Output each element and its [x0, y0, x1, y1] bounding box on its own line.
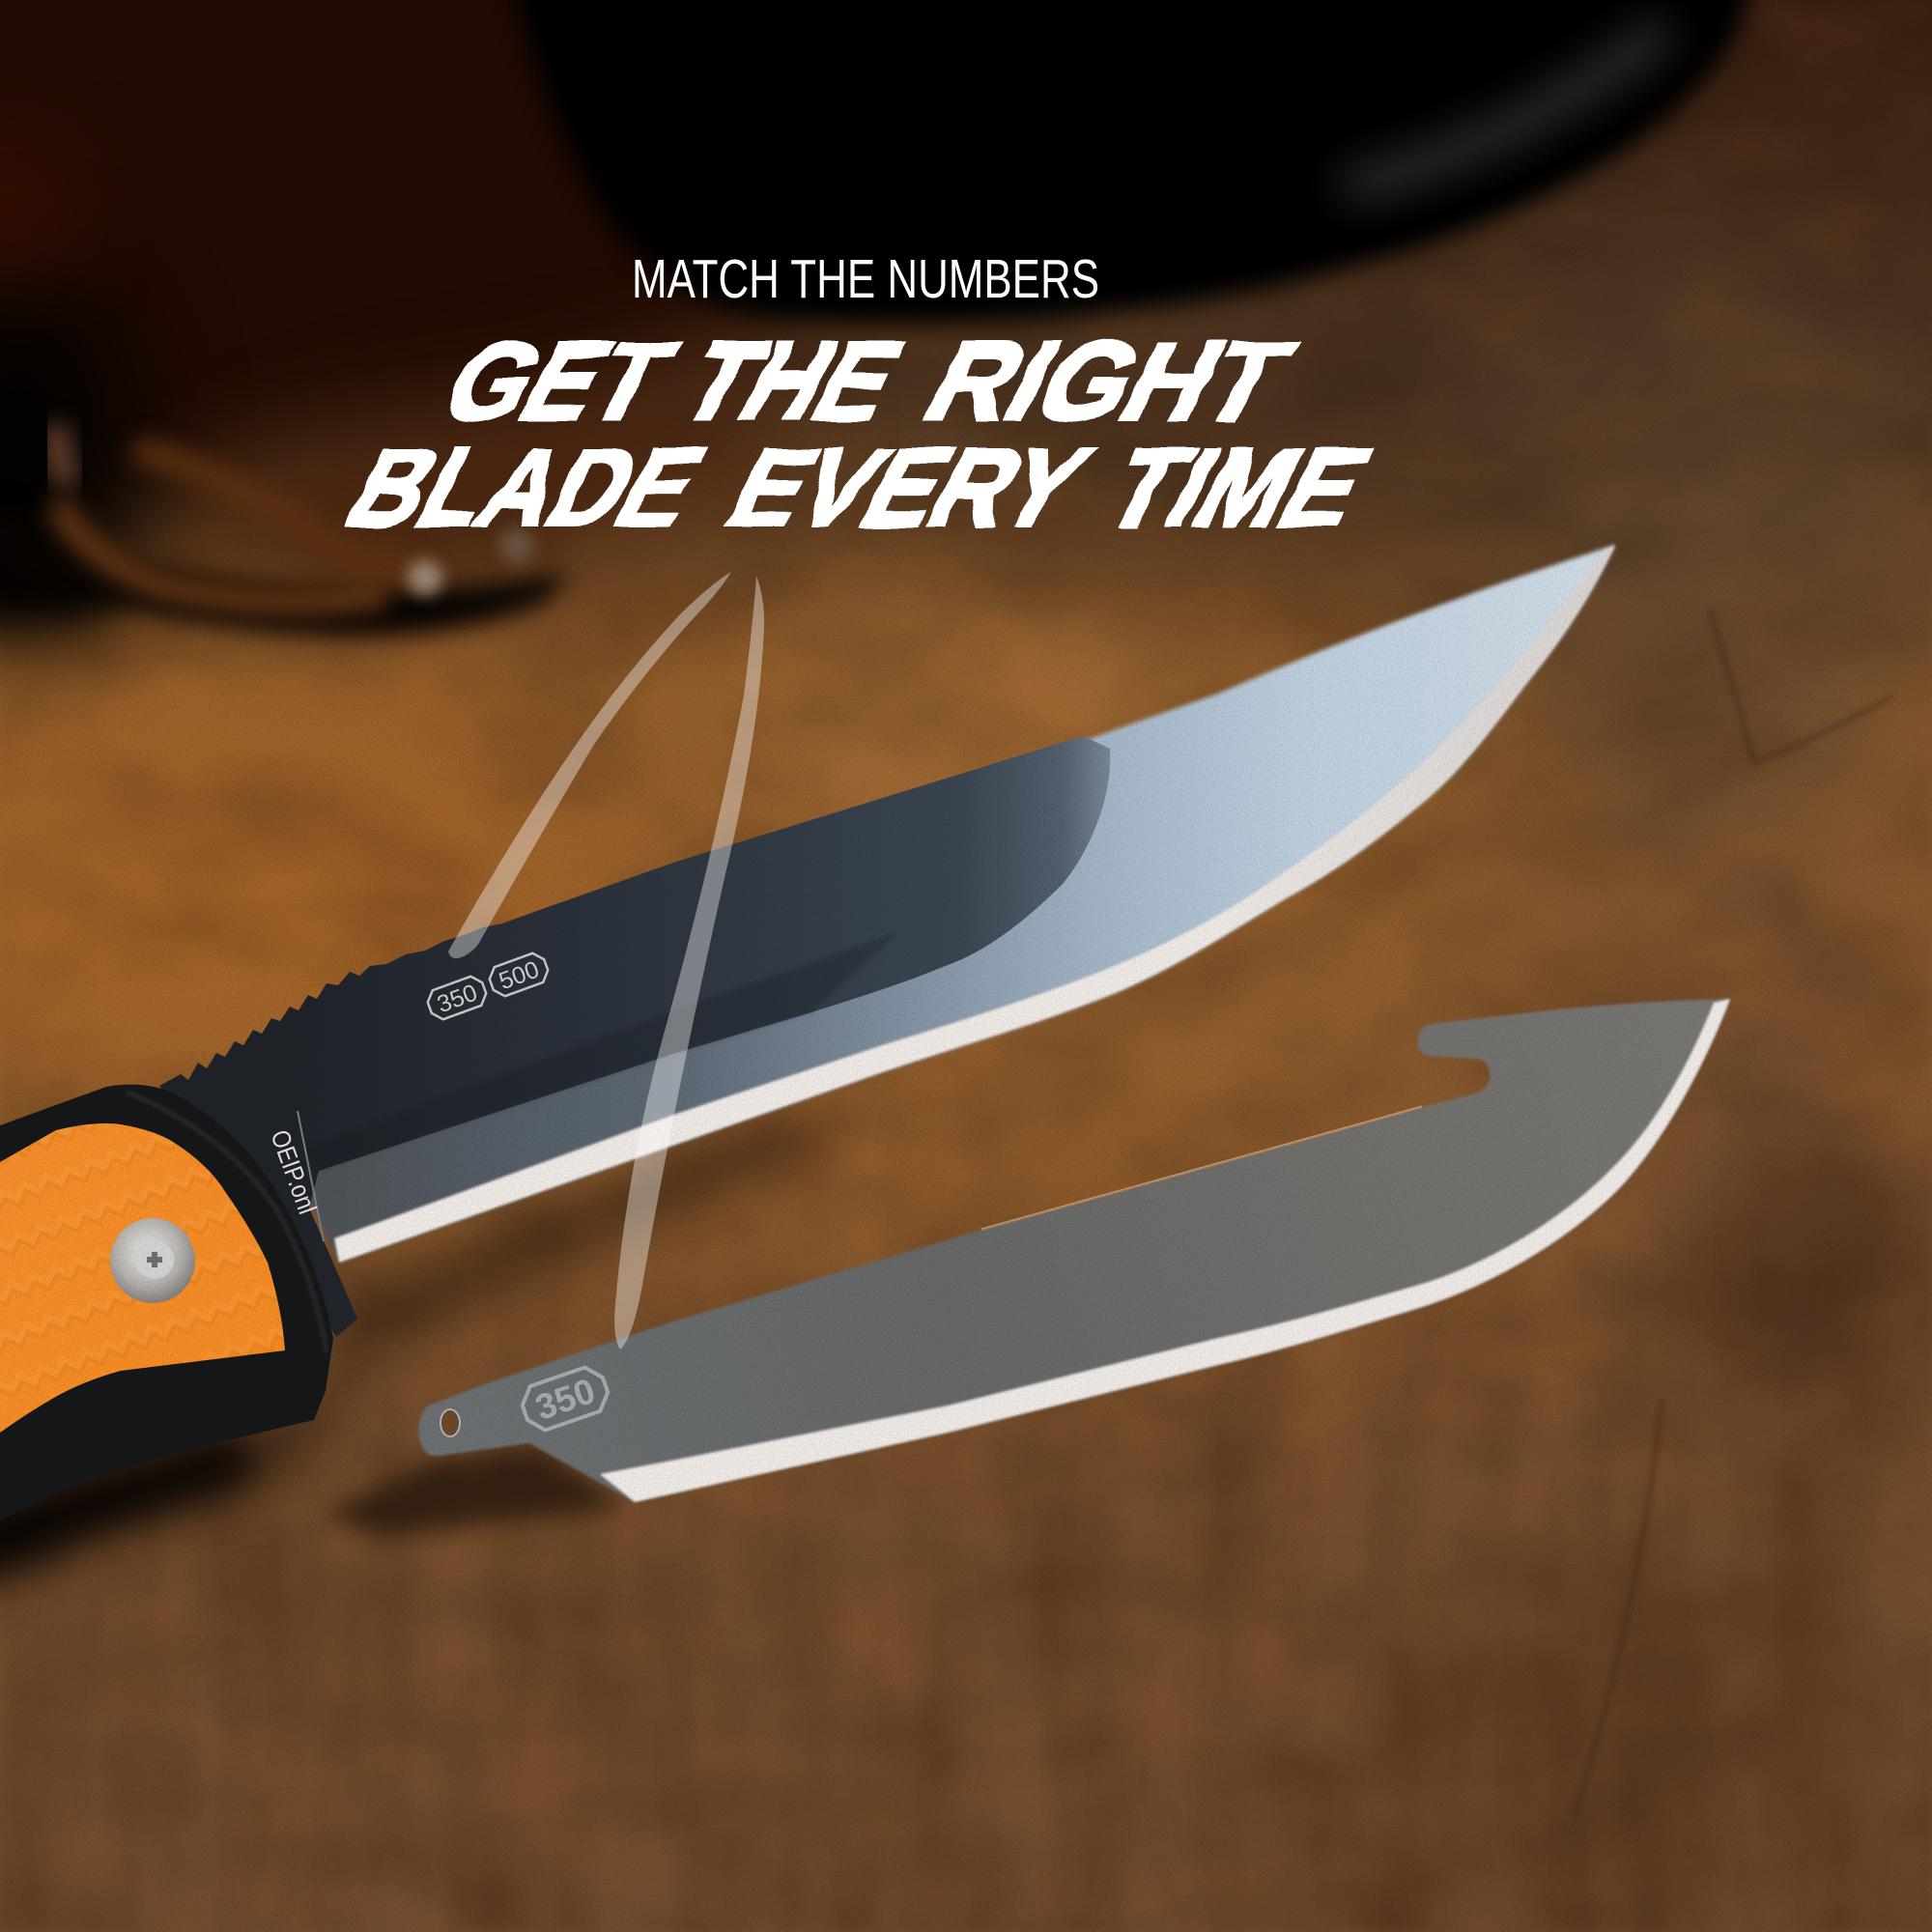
dark coated section with serrated spine: [159, 736, 1110, 1337]
heading block: [328, 248, 1390, 549]
title line 2: [328, 426, 1390, 549]
orange light gleam along spine: [981, 1107, 1422, 1230]
badge: 350 on knife blade: 350: [434, 980, 481, 1018]
title line 1: GET: [423, 320, 694, 442]
sharpened edge: [334, 545, 1615, 1263]
hollow-grind texture band: [301, 932, 898, 1171]
rubber rim highlight: [126, 1092, 327, 1352]
shadow beneath knife: [0, 1111, 850, 1604]
badge: 350 on knife blade: [424, 974, 490, 1022]
grip texture: [0, 1123, 285, 1433]
title line 1: THE: [662, 320, 923, 442]
knife handle: [0, 1085, 333, 1520]
title line 2: TIME: [1086, 426, 1390, 549]
title line 1: RIGHT: [906, 320, 1312, 442]
title line 2: BLADE: [328, 426, 724, 549]
background: dark out-of-focus object at top: [0, 0, 1753, 638]
blade body silver: [290, 545, 1615, 1263]
background: blurred leather sheath and rope: [0, 425, 570, 636]
orange grip inlay: [0, 1123, 285, 1433]
subtitle: MATCH THE NUMBERS: [632, 248, 1099, 310]
sharpened edge: [600, 999, 1730, 1502]
blade body: [418, 999, 1730, 1502]
pointer arrows linking text to badges: [448, 572, 764, 1350]
badge: 350 on replacement blade: [518, 1363, 612, 1435]
replaceable blade (350): [418, 999, 1730, 1502]
arrow to replacement blade badge: [614, 576, 764, 1350]
handle black overmold: [0, 1085, 333, 1520]
engraved model text: OEIP.onl: [265, 1126, 322, 1218]
badge: 500 on knife blade: [486, 951, 552, 999]
arrow to knife badges: [448, 572, 731, 958]
knife blade: [159, 545, 1615, 1337]
title line 1: [423, 320, 1312, 442]
ricasso line: [298, 1111, 324, 1241]
badge: 500 on knife blade: 500: [496, 956, 543, 995]
title line 2: EVERY: [708, 426, 1109, 549]
badge: 350 on replacement blade: 350: [530, 1371, 600, 1428]
orange light gleam at spine: [1023, 719, 1159, 763]
screw: [110, 1218, 195, 1303]
mounting hole: [440, 1409, 460, 1436]
